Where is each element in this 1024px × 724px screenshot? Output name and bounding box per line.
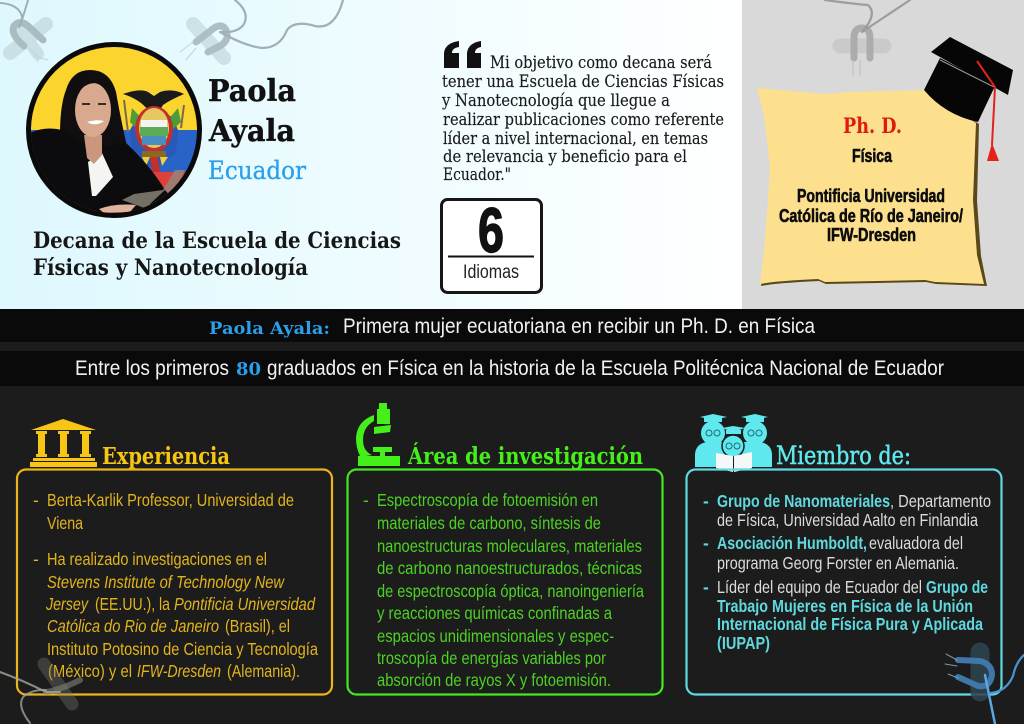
heading: experience: Experiencia xyxy=(102,443,230,470)
text: research list: - xyxy=(363,490,369,510)
text: experience list: (Alemania). xyxy=(227,661,300,681)
text: membership list: - xyxy=(703,491,709,511)
text: quote: Ecuador." xyxy=(443,165,511,185)
text: experience list: Ha realizado investigaciones en el xyxy=(47,549,267,569)
icon: microscope xyxy=(356,403,400,466)
text: quote: líder a nivel internacional, en temas xyxy=(443,129,708,149)
text: degree: Ph. D. xyxy=(843,113,902,138)
research box xyxy=(348,470,662,694)
text: experience list: (Brasil), el xyxy=(225,616,290,636)
text: membership list: Grupo de xyxy=(926,577,988,597)
text: research list: materiales de carbono, síntesis de xyxy=(377,513,601,533)
text: quote: tener una Escuela de Ciencias Físicas xyxy=(442,72,724,92)
text: experience list: Viena xyxy=(47,513,83,533)
banner: first woman: Paola Ayala: xyxy=(209,319,330,339)
text: membership list: programa Georg Forster en Alemania. xyxy=(717,553,959,573)
text: membership list: , Departamento xyxy=(890,491,991,511)
text: membership list: Asociación Humboldt, xyxy=(717,533,867,553)
text: degree details: Física xyxy=(852,146,893,166)
text: membership list: Líder del equipo de Ecuador del xyxy=(717,577,922,597)
text: experience list: IFW-Dresden xyxy=(137,661,221,681)
heading: membership: Miembro de: xyxy=(776,441,911,470)
text: membership list: - xyxy=(703,577,709,597)
banner: graduates: 80 xyxy=(236,359,261,380)
stat box: languages: 6 xyxy=(478,196,504,266)
decoration: top left clip xyxy=(0,0,343,62)
text: membership list xyxy=(703,491,991,653)
icon: coat of arms xyxy=(123,90,184,172)
text: experience list: - xyxy=(33,549,39,569)
text: experience list: Jersey xyxy=(45,594,89,614)
banner: graduates: graduados en Física en la historia de la Escuela Politécnica Nacional de Ecuador xyxy=(267,357,944,380)
banner: graduates: Entre los primeros xyxy=(75,357,229,380)
experience box xyxy=(17,470,332,694)
icon: graduation cap xyxy=(924,37,1013,161)
person xyxy=(30,70,185,220)
text: degree details: Pontificia Universidad xyxy=(797,186,945,206)
text: research list: troscopía de energías variables por xyxy=(377,648,606,668)
text: membership list: (IUPAP) xyxy=(717,633,770,653)
membership box xyxy=(686,470,1002,694)
text: role xyxy=(33,228,401,281)
text: experience list: Pontificia Universidad xyxy=(174,594,316,614)
panel: degree background xyxy=(742,0,1024,309)
panel: top background xyxy=(0,0,742,309)
text: quote xyxy=(441,53,724,185)
text: research list: nanoestructuras moleculares, materiales xyxy=(377,536,642,556)
banner: first woman: Primera mujer ecuatoriana en recibir un Ph. D. en Física xyxy=(343,315,815,338)
banner: first woman xyxy=(0,309,1024,342)
text: research list: de carbono nanoestructurados, técnicas xyxy=(377,558,642,578)
text: country: Ecuador xyxy=(208,156,306,185)
text: quote: y Nanotecnología que llegue a xyxy=(441,91,670,111)
icon: graduates reading xyxy=(695,414,772,472)
text: experience list: (México) y el xyxy=(48,661,132,681)
panel: experience xyxy=(17,419,332,694)
text: role: Decana de la Escuela de Ciencias xyxy=(33,228,401,254)
text: membership list: Trabajo Mujeres en Física de la Unión xyxy=(717,596,973,616)
icon: temple xyxy=(30,419,97,467)
heading: name: Paola xyxy=(208,74,296,109)
text: research list: espacios unidimensionales y espec- xyxy=(377,626,614,646)
text: quote: realizar publicaciones como referente xyxy=(443,110,724,130)
text: experience list: Instituto Potosino de Ciencia y Tecnología xyxy=(47,639,318,659)
decoration: top right clip xyxy=(825,0,910,76)
text: quote: Mi objetivo como decana será xyxy=(490,53,712,73)
text: role: Físicas y Nanotecnología xyxy=(33,255,308,281)
panel: parchment xyxy=(757,88,987,286)
heading: name: Ayala xyxy=(208,114,295,149)
stat box: languages xyxy=(442,196,542,292)
icon: quotation marks xyxy=(444,41,481,68)
portrait with flag xyxy=(26,42,202,218)
text: degree details: IFW-Dresden xyxy=(827,225,916,245)
panel: dark lower background xyxy=(0,309,1024,724)
stat box: languages: Idiomas xyxy=(463,262,519,283)
text: experience list: (EE.UU.), la xyxy=(95,594,170,614)
text: research list: de espectroscopía óptica, nanoingeniería xyxy=(377,581,644,601)
text: membership list: - xyxy=(703,533,709,553)
text: membership list: Grupo de Nanomateriales xyxy=(717,491,890,511)
text: quote: de relevancia y beneficio para el xyxy=(443,147,687,167)
text: degree details xyxy=(779,146,963,245)
text: experience list: Berta-Karlik Professor, Universidad de xyxy=(47,490,294,510)
heading: name xyxy=(208,74,296,149)
text: research list: y reacciones químicas confinadas a xyxy=(377,603,612,623)
panel: research xyxy=(348,403,662,694)
decoration: bottom left clip xyxy=(0,664,80,723)
text: experience list xyxy=(33,490,318,681)
text: membership list: evaluadora del xyxy=(869,533,963,553)
text: research list: Espectroscopía de fotoemisión en xyxy=(377,490,598,510)
banner: graduates xyxy=(0,351,1024,386)
heading: research: Área de investigación xyxy=(407,443,643,470)
text: experience list: - xyxy=(33,490,39,510)
text: research list xyxy=(363,490,644,690)
text: research list: absorción de rayos X y fotoemisión. xyxy=(377,670,611,690)
text: experience list: Stevens Institute of Technology New xyxy=(47,572,285,592)
decoration: bottom right clip xyxy=(945,652,1024,724)
panel: membership xyxy=(686,414,1002,694)
text: degree details: Católica de Río de Janeiro/ xyxy=(779,206,963,226)
text: experience list: Católica do Rio de Janeiro xyxy=(47,616,219,636)
